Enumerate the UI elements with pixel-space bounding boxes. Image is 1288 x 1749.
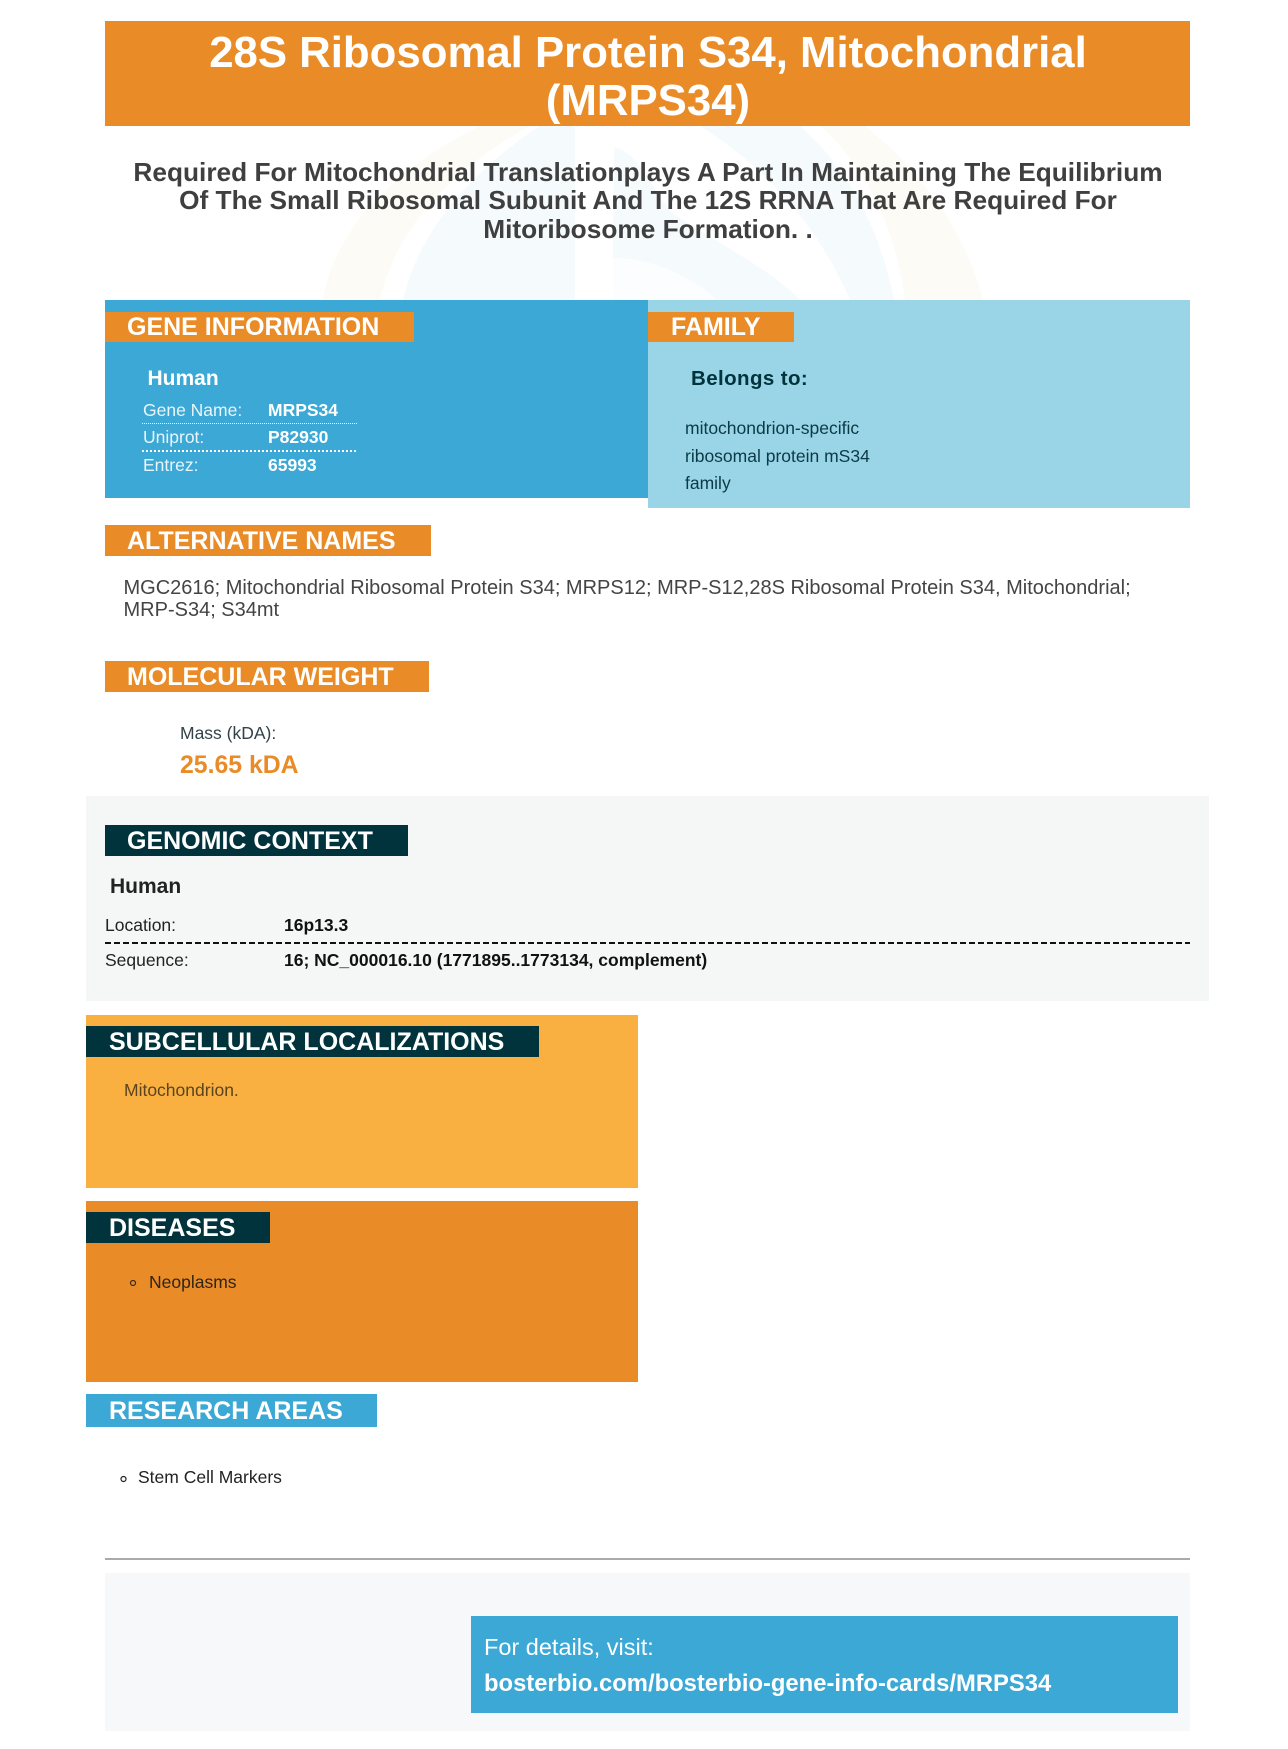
- genomic location table: Location:: [105, 915, 176, 935]
- heading: diseases: DISEASES: [109, 1214, 235, 1242]
- gene details table: Entrez:: [143, 455, 198, 475]
- species label: Human: [148, 367, 219, 390]
- localization text: Mitochondrion.: [124, 1080, 239, 1100]
- callout: details link: For details, visit:: [484, 1634, 654, 1660]
- callout: details link: bosterbio.com/bosterbio-gene-info-cards/MRPS34: [484, 1670, 1052, 1697]
- panel: footer: [105, 1573, 1190, 1731]
- molecular weight value: 25.65 kDA: [180, 752, 299, 779]
- heading: gene information: GENE INFORMATION: [127, 313, 379, 341]
- gene details table: MRPS34: [268, 400, 338, 420]
- gene details table: Uniprot:: [143, 427, 204, 447]
- subtitle: Mitoribosome Formation. .: [483, 214, 813, 244]
- subtitle: Of The Small Ribosomal Subunit And The 12S RRNA That Are Required For: [179, 185, 1117, 215]
- heading: molecular weight: MOLECULAR WEIGHT: [127, 663, 394, 691]
- heading: genomic context: GENOMIC CONTEXT: [127, 827, 373, 855]
- family description: family: [685, 473, 731, 493]
- panel: genomic context: [86, 796, 1209, 1001]
- callout: details link: [471, 1616, 1178, 1713]
- family description: ribosomal protein mS34: [685, 446, 870, 466]
- genomic location table: [105, 915, 1190, 970]
- alternative names text: MRP-S34; S34mt: [124, 599, 280, 621]
- molecular weight value: [180, 723, 299, 779]
- panel: family: [648, 300, 1190, 508]
- molecular weight value: Mass (kDA):: [180, 723, 276, 743]
- family description: [685, 418, 870, 493]
- heading: diseases: [86, 1212, 270, 1243]
- species label: Human: [110, 875, 181, 898]
- heading: research areas: [86, 1394, 377, 1427]
- disease list: Neoplasms: [149, 1272, 237, 1292]
- panel: diseases: [86, 1201, 638, 1382]
- panel: gene information: [105, 300, 648, 498]
- title banner: (MRPS34): [546, 76, 750, 125]
- watermark logo: [323, 126, 983, 300]
- family description: mitochondrion-specific: [685, 418, 859, 438]
- heading: research areas: RESEARCH AREAS: [109, 1397, 343, 1425]
- heading: alternative names: ALTERNATIVE NAMES: [127, 527, 396, 555]
- genomic location table: 16p13.3: [284, 915, 348, 935]
- belongs to label: Belongs to:: [691, 367, 808, 390]
- heading: family: FAMILY: [671, 313, 761, 341]
- gene details table: 65993: [268, 455, 317, 475]
- alternative names text: [124, 577, 1131, 621]
- title banner: [105, 21, 1190, 126]
- panel: subcellular localizations: [86, 1015, 638, 1188]
- subtitle: [133, 157, 1163, 244]
- gene details table: Gene Name:: [143, 400, 242, 420]
- title banner: 28S Ribosomal Protein S34, Mitochondrial: [209, 28, 1087, 77]
- subtitle: Required For Mitochondrial Translationplays A Part In Maintaining The Equilibrium: [133, 157, 1163, 187]
- genomic location table: 16; NC_000016.10 (1771895..1773134, complement): [284, 950, 707, 970]
- gene details table: P82930: [268, 427, 329, 447]
- genomic location table: Sequence:: [105, 950, 189, 970]
- heading: subcellular localizations: SUBCELLULAR LOCALIZATIONS: [109, 1028, 504, 1056]
- heading: family: [648, 312, 794, 342]
- gene details table: [142, 400, 357, 475]
- research areas list: Stem Cell Markers: [138, 1467, 282, 1487]
- alternative names text: MGC2616; Mitochondrial Ribosomal Protein S34; MRPS12; MRP-S12,28S Ribosomal Protein S34, Mitochondrial;: [124, 577, 1131, 599]
